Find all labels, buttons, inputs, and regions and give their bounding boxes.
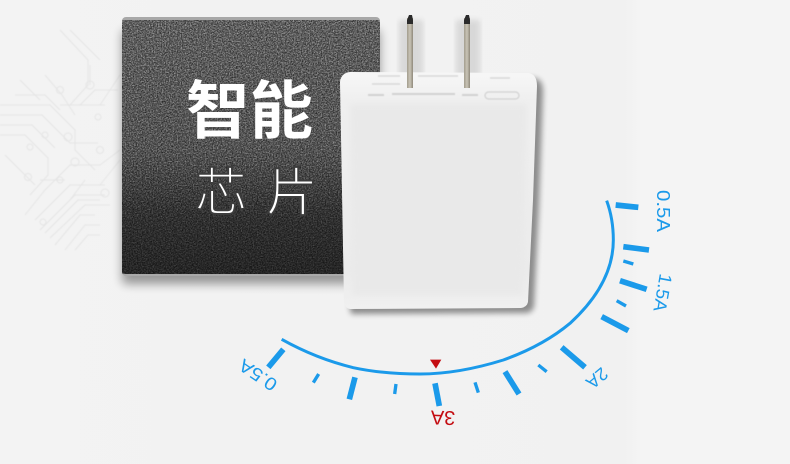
prongs	[407, 15, 470, 88]
current gauge	[268, 201, 649, 406]
adapter body	[340, 72, 537, 309]
gauge arc	[282, 201, 613, 374]
label: 3A: 3A	[430, 406, 456, 428]
heading: 智能: 智能	[186, 77, 313, 147]
label: 1.5A: 1.5A	[649, 272, 676, 313]
power adapter	[340, 15, 543, 314]
chip panel	[122, 17, 380, 284]
label: 0.5A right: 0.5A	[653, 190, 673, 232]
circuit board pattern	[0, 30, 120, 250]
gauge ticks	[268, 205, 649, 406]
red pointer	[430, 360, 441, 369]
adapter label markings	[368, 76, 519, 99]
label: 2A: 2A	[582, 363, 612, 393]
subheading: 芯片: 芯片	[195, 165, 337, 223]
label: 0.5A left: 0.5A	[235, 355, 281, 395]
